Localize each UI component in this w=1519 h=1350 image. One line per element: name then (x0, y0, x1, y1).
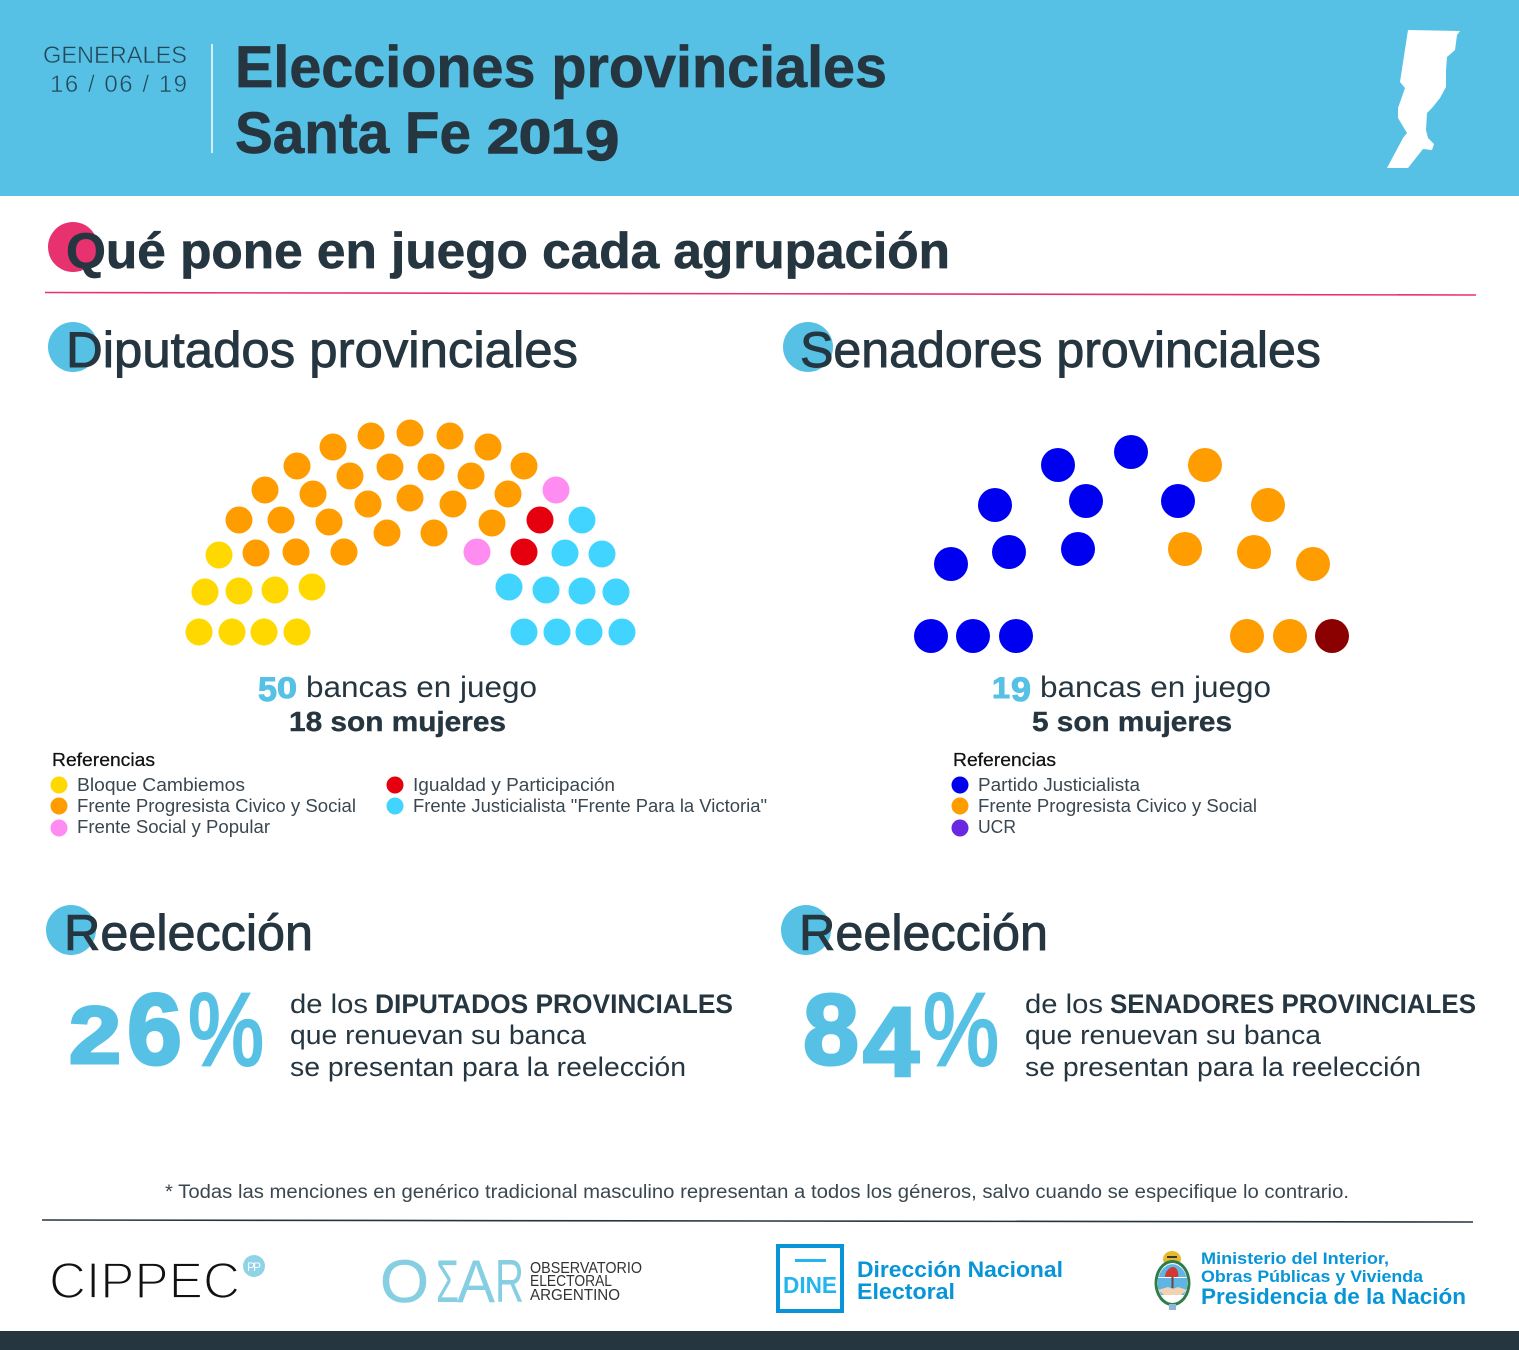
icon: Santa Fe map (1387, 30, 1460, 168)
heading: Diputados provinciales: Diputados provinciales (66, 322, 578, 378)
legend: senadores: Frente Progresista Civico y Social (978, 796, 1257, 816)
seats: Frente Justicialista (496, 506, 636, 646)
legend: diputados: Bloque Cambiemos (77, 775, 245, 795)
legend: diputados: Referencias (52, 750, 155, 770)
logo: OEAR: R (495, 1248, 524, 1315)
title (235, 35, 887, 172)
seats: Frente Progresista (1168, 448, 1330, 653)
logo: national coat of arms (1154, 1251, 1190, 1310)
title: Santa Fe (235, 101, 471, 166)
chart: diputados seats hemicycle (186, 420, 636, 646)
stat description: se presentan para la reelección (1025, 1052, 1421, 1082)
stat: 84% senadores: 4 (863, 987, 919, 1097)
logo: OEAR: O (380, 1248, 429, 1316)
senadores seat totals: 9 (1011, 671, 1031, 709)
logo: DINE: Dirección Nacional (857, 1257, 1063, 1282)
heading: Senadores provinciales: Senadores provinciales (800, 322, 1321, 378)
seat: UCR (1315, 619, 1349, 653)
footnote: * Todas las menciones en genérico tradicional masculino representan a todos los géneros, salvo cuando se especifique lo contrario. (165, 1182, 1349, 1203)
election date (43, 42, 187, 98)
logo: Presidencia de la Nación: Ministerio del Interior, (1201, 1249, 1389, 1268)
logo: Presidencia de la Nación: Obras Públicas y Vivienda (1201, 1267, 1424, 1286)
stat description (1025, 989, 1476, 1082)
logo: Presidencia de la Nación: Presidencia de la Nación (1201, 1284, 1466, 1309)
legend: diputados: Frente Justicialista "Frente Para la Victoria" (413, 796, 767, 816)
stat description: que renuevan su banca (290, 1020, 587, 1050)
logo: OEAR: ELECTORAL (530, 1273, 612, 1290)
stat description: se presentan para la reelección (290, 1052, 686, 1082)
senadores seat totals (992, 671, 1271, 737)
senadores seat totals: bancas en juego (1040, 671, 1271, 704)
legend: senadores: Referencias (953, 750, 1056, 770)
diputados seat totals (258, 671, 537, 737)
stat description: SENADORES PROVINCIALES (1110, 989, 1476, 1019)
seats: Frente Social y Popular (464, 476, 570, 566)
section heading: what each group has at stake: Qué pone en juego cada agrupación (66, 223, 950, 279)
stat description: de los (290, 989, 368, 1019)
logo: DINE (778, 1246, 1063, 1311)
chart: senadores seats hemicycle (914, 435, 1349, 653)
logo: DINE: Electoral (857, 1279, 955, 1304)
stat description (290, 989, 733, 1082)
senadores seat totals: 1 (992, 672, 1010, 705)
seats: Bloque Cambiemos (186, 542, 326, 646)
election date: GENERALES (43, 42, 187, 69)
legend: diputados: Frente Social y Popular (77, 817, 270, 837)
diputados seat totals: 5 (258, 671, 277, 709)
stat description: DIPUTADOS PROVINCIALES (375, 989, 733, 1019)
diputados seat totals: bancas en juego (306, 671, 537, 704)
seats: Igualdad y Participación (510, 506, 554, 566)
logo: CIPPEC: CIPPEC (49, 1252, 240, 1309)
logo: OEAR: OBSERVATORIO (530, 1260, 642, 1277)
logo: DINE: DINE (783, 1272, 837, 1298)
heading: Reelección diputados: Reelección (64, 905, 313, 961)
logo: CIPPEC: PP (247, 1260, 261, 1274)
election date: 16 / 06 / 19 (50, 71, 187, 98)
stat: 84% senadores: 8 (803, 974, 859, 1086)
stat: 84% senadores (803, 972, 1476, 1097)
legend: diputados: Igualdad y Participación (413, 775, 615, 795)
senadores seat totals: 5 son mujeres (1032, 706, 1232, 737)
seats: Frente Progresista (226, 420, 538, 566)
logo: OEAR: Σ (436, 1248, 459, 1315)
logo: OEAR (380, 1248, 642, 1316)
diputados seat totals: 18 son mujeres (289, 706, 506, 737)
heading: Reelección senadores: Reelección (799, 905, 1048, 961)
stat: 26% diputados: 6 (127, 974, 182, 1086)
legend: diputados: Frente Progresista Civico y Social (77, 796, 356, 816)
diputados seat totals: 0 (277, 672, 297, 705)
stat description: de los (1025, 989, 1103, 1019)
stat: 26% diputados: % (188, 972, 264, 1087)
legend: diputados (50, 750, 767, 837)
stat: 26% diputados: 2 (69, 991, 121, 1081)
stat: 26% diputados (69, 972, 733, 1087)
legend: senadores (952, 750, 1257, 837)
stat description: que renuevan su banca (1025, 1020, 1322, 1050)
stat: 84% senadores: % (923, 972, 999, 1087)
logo: OEAR: A (457, 1248, 495, 1315)
logo: Presidencia de la Nación (1201, 1249, 1466, 1309)
title: 9 (585, 108, 619, 172)
legend: senadores: Partido Justicialista (978, 775, 1141, 795)
title: Elecciones provinciales (235, 35, 887, 100)
logo: OEAR: ARGENTINO (530, 1287, 620, 1304)
title: 201 (487, 110, 583, 164)
legend: senadores: UCR (978, 817, 1016, 837)
seats: Partido Justicialista (914, 435, 1195, 653)
header band (0, 0, 1519, 196)
